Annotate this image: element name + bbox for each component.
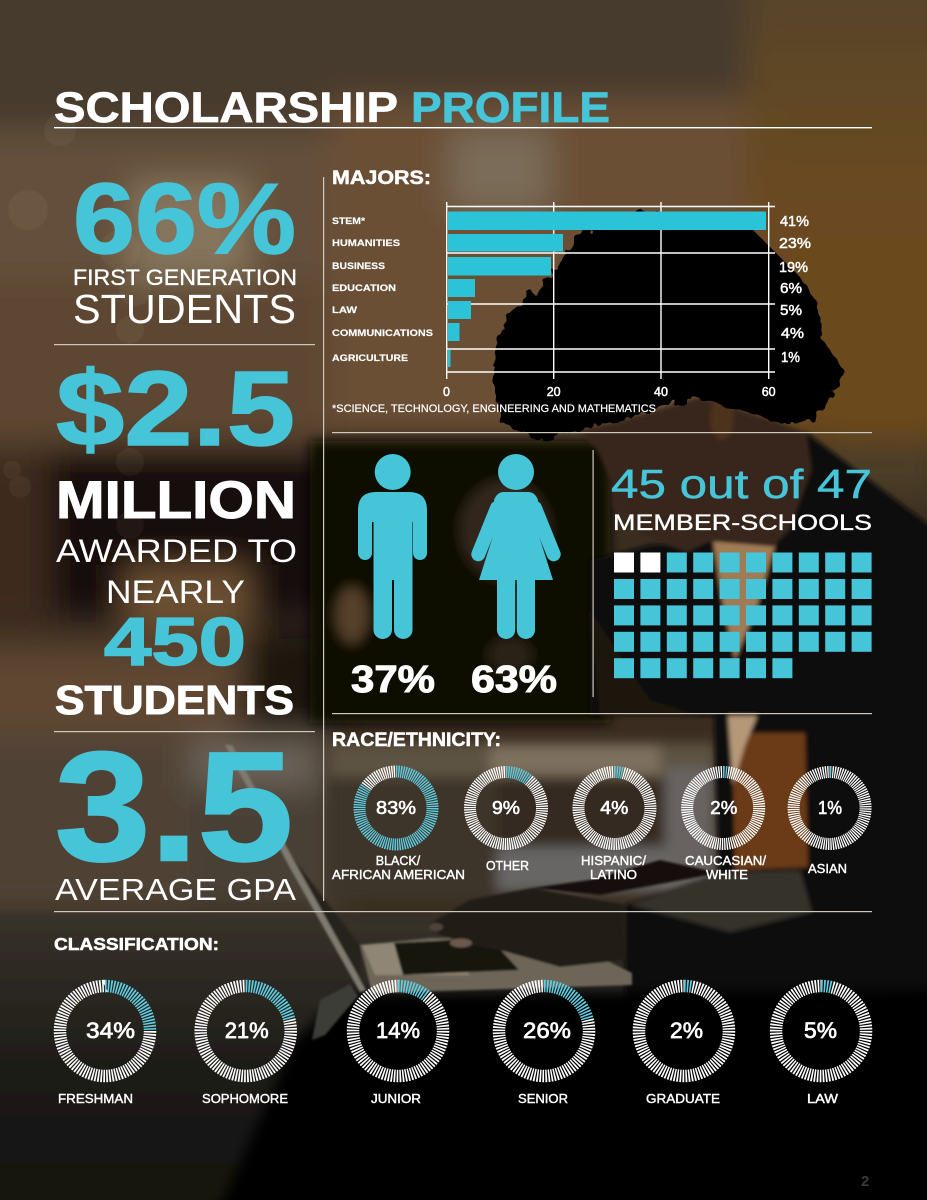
chart bars	[448, 212, 766, 367]
donut: junior 14%: JUNIOR	[371, 1092, 421, 1106]
chart values	[779, 213, 811, 366]
chart values: 19%	[779, 259, 808, 276]
background: jacket and shoulder	[590, 433, 927, 1010]
background: laptop and hand	[225, 745, 719, 1040]
title: SCHOLARSHIP	[54, 84, 398, 132]
chart values: 1%	[781, 349, 800, 366]
donut: sophomore 21%	[201, 986, 291, 1106]
stat: $2.5 million awarded: MILLION	[56, 471, 296, 530]
stat: 66% first generation students	[73, 163, 297, 332]
waffle chart: 45 of 47 schools	[614, 552, 872, 678]
stat: $2.5 million awarded: AWARDED TO	[56, 533, 297, 569]
donut: law 5%: LAW	[807, 1092, 838, 1106]
chart grid	[446, 202, 775, 379]
chart axis: 20	[547, 385, 561, 399]
chart values: 41%	[780, 213, 809, 230]
chart values: 4%	[781, 325, 804, 342]
donut: asian 1%	[794, 772, 866, 876]
chart category labels: HUMANITIES	[332, 238, 401, 249]
donut: junior 14%: 14%	[376, 1018, 420, 1043]
donut: black/african american 83%: BLACK/	[376, 854, 421, 868]
donut: black/african american 83%	[332, 772, 465, 882]
background: blurred interior	[0, 0, 927, 915]
title	[54, 84, 610, 132]
donut: asian 1%: 1%	[818, 798, 842, 818]
gender percentages	[351, 659, 557, 701]
donut: asian 1%: ASIAN	[808, 862, 847, 876]
chart category labels: AGRICULTURE	[332, 353, 409, 364]
donut: hispanic/latino 4%: HISPANIC/	[581, 854, 647, 868]
chart axis: 60	[762, 385, 776, 399]
donut: senior 26%: SENIOR	[518, 1092, 568, 1106]
chart axis	[443, 385, 776, 399]
stat: $2.5 million awarded: STUDENTS	[55, 677, 294, 723]
background: bokeh lights	[3, 114, 151, 539]
heading: race/ethnicity: RACE/ETHNICITY:	[332, 730, 501, 751]
chart category labels: EDUCATION	[332, 283, 396, 294]
background: dark band behind figures	[0, 441, 927, 1200]
donut: law 5%	[776, 986, 866, 1106]
stat: 66% first generation students: 66%	[73, 163, 296, 275]
donut: caucasian/white 2%	[685, 772, 767, 882]
chart category labels: LAW	[332, 305, 358, 316]
donut: caucasian/white 2%: CAUCASIAN/	[685, 854, 767, 868]
background: lap and dark lower area	[210, 990, 927, 1200]
page number: 2	[861, 1173, 869, 1190]
donut: freshman 34%: FRESHMAN	[58, 1092, 133, 1106]
chart values: 23%	[779, 235, 811, 252]
background: hair	[493, 210, 843, 440]
icon: female figure	[478, 454, 554, 639]
chart values: 5%	[780, 302, 802, 319]
chart category labels: BUSINESS	[332, 261, 386, 272]
donut: sophomore 21%: 21%	[225, 1018, 269, 1043]
donut: black/african american 83%: AFRICAN AMERICAN	[332, 868, 465, 882]
member schools heading: MEMBER-SCHOOLS	[613, 510, 872, 535]
member schools heading: 45 out of 47	[611, 461, 872, 507]
chart category labels: STEM*	[332, 216, 365, 227]
donut: other 9%	[470, 772, 542, 873]
stat: 3.5 average GPA: AVERAGE GPA	[55, 872, 296, 907]
background: lower fade	[0, 914, 927, 1200]
heading: majors: MAJORS:	[332, 168, 431, 189]
stat: 66% first generation students: FIRST GENERATION	[73, 265, 297, 290]
donut: other 9%: OTHER	[486, 859, 529, 873]
chart category labels	[332, 216, 434, 364]
chart footnote: *SCIENCE, TECHNOLOGY, ENGINEERING AND MATHEMATICS	[332, 403, 656, 415]
donut: caucasian/white 2%: 2%	[710, 798, 737, 818]
heading: classification: CLASSIFICATION:	[54, 934, 219, 954]
bar chart: majors	[332, 202, 811, 415]
donut: graduate 2%	[639, 986, 729, 1106]
donut: graduate 2%: 2%	[670, 1018, 703, 1043]
stat: $2.5 million awarded: NEARLY	[106, 574, 245, 610]
donut: freshman 34%: 34%	[86, 1018, 135, 1043]
donut: freshman 34%	[58, 986, 150, 1106]
stat: $2.5 million awarded	[55, 350, 297, 723]
donut: hispanic/latino 4%: 4%	[600, 798, 628, 818]
stat: $2.5 million awarded: $2.5	[56, 350, 295, 468]
member schools heading	[611, 461, 872, 535]
donut: black/african american 83%: 83%	[376, 798, 416, 818]
gender percentages: 37%	[351, 659, 435, 701]
donut: sophomore 21%: SOPHOMORE	[202, 1092, 288, 1106]
chart axis: 0	[443, 385, 450, 399]
donut: other 9%: 9%	[492, 798, 520, 818]
donut: senior 26%	[499, 986, 589, 1106]
chart category labels: COMMUNICATIONS	[332, 328, 434, 339]
chart values: 6%	[780, 280, 802, 297]
background: face	[580, 396, 812, 553]
donut: junior 14%	[353, 986, 443, 1106]
chart axis: 40	[654, 385, 668, 399]
title: PROFILE	[411, 84, 610, 132]
donut: hispanic/latino 4%: LATINO	[590, 868, 637, 882]
gender percentages: 63%	[471, 659, 557, 701]
stat: 3.5 average GPA: 3.5	[55, 720, 293, 893]
donut: senior 26%: 26%	[523, 1018, 571, 1043]
donut: graduate 2%: GRADUATE	[646, 1092, 720, 1106]
donut: caucasian/white 2%: WHITE	[706, 868, 748, 882]
donut: hispanic/latino 4%	[578, 772, 650, 882]
stat: $2.5 million awarded: 450	[104, 604, 246, 680]
icon: male figure	[358, 454, 427, 639]
stat: 66% first generation students: STUDENTS	[73, 286, 296, 332]
donut: law 5%: 5%	[804, 1018, 837, 1043]
